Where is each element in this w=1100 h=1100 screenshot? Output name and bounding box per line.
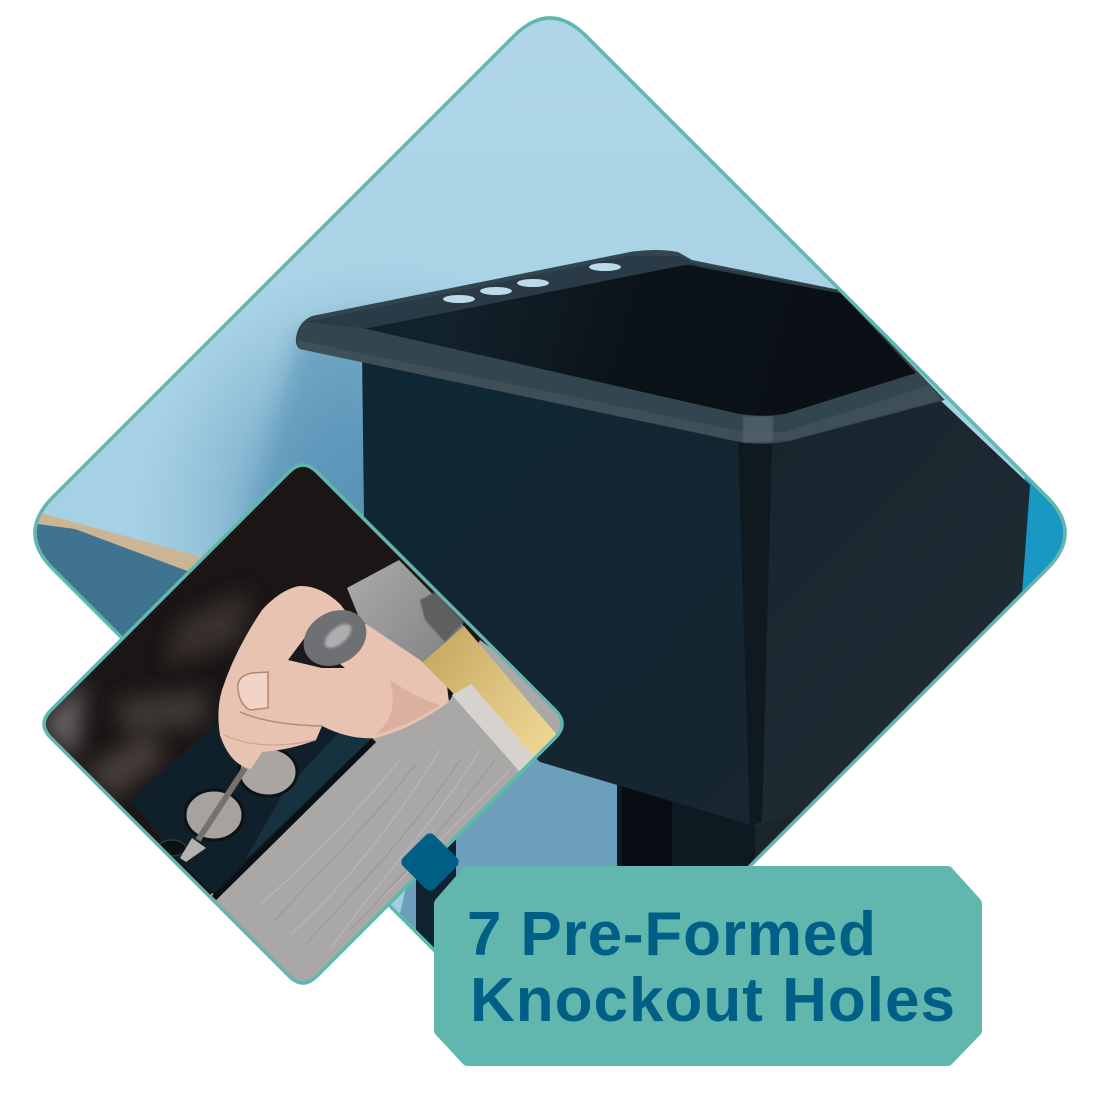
wall background [42,20,1025,930]
chisel [180,768,245,862]
sink front face [362,352,755,826]
hammer handle [420,626,557,772]
wood floor [210,640,560,982]
label text: 7 Pre-Formed [467,900,876,969]
pre-formed knockout holes [443,263,621,303]
sink basin interior [362,264,916,416]
sink edge with holes [130,722,374,898]
sink legs [416,785,802,948]
connector marker diamond [399,831,461,893]
label text: Knockout Holes [470,966,955,1035]
label background [434,866,982,1066]
panel: knockout hole inset photo diamond [42,463,564,985]
label text [467,900,955,1035]
hammer head [347,560,464,662]
inset diamond border [44,465,562,983]
hand gripping chisel [218,586,449,769]
floor and rug [36,514,202,636]
bright wall at right corner [1022,477,1064,592]
sink corner shading [738,440,772,826]
callout label: 7 Pre-Formed Knockout Holes [434,866,982,1066]
dark sink surface background [46,466,489,895]
sink side face [742,400,1030,826]
chisel striking cap [288,610,366,668]
sink rim [296,250,945,444]
